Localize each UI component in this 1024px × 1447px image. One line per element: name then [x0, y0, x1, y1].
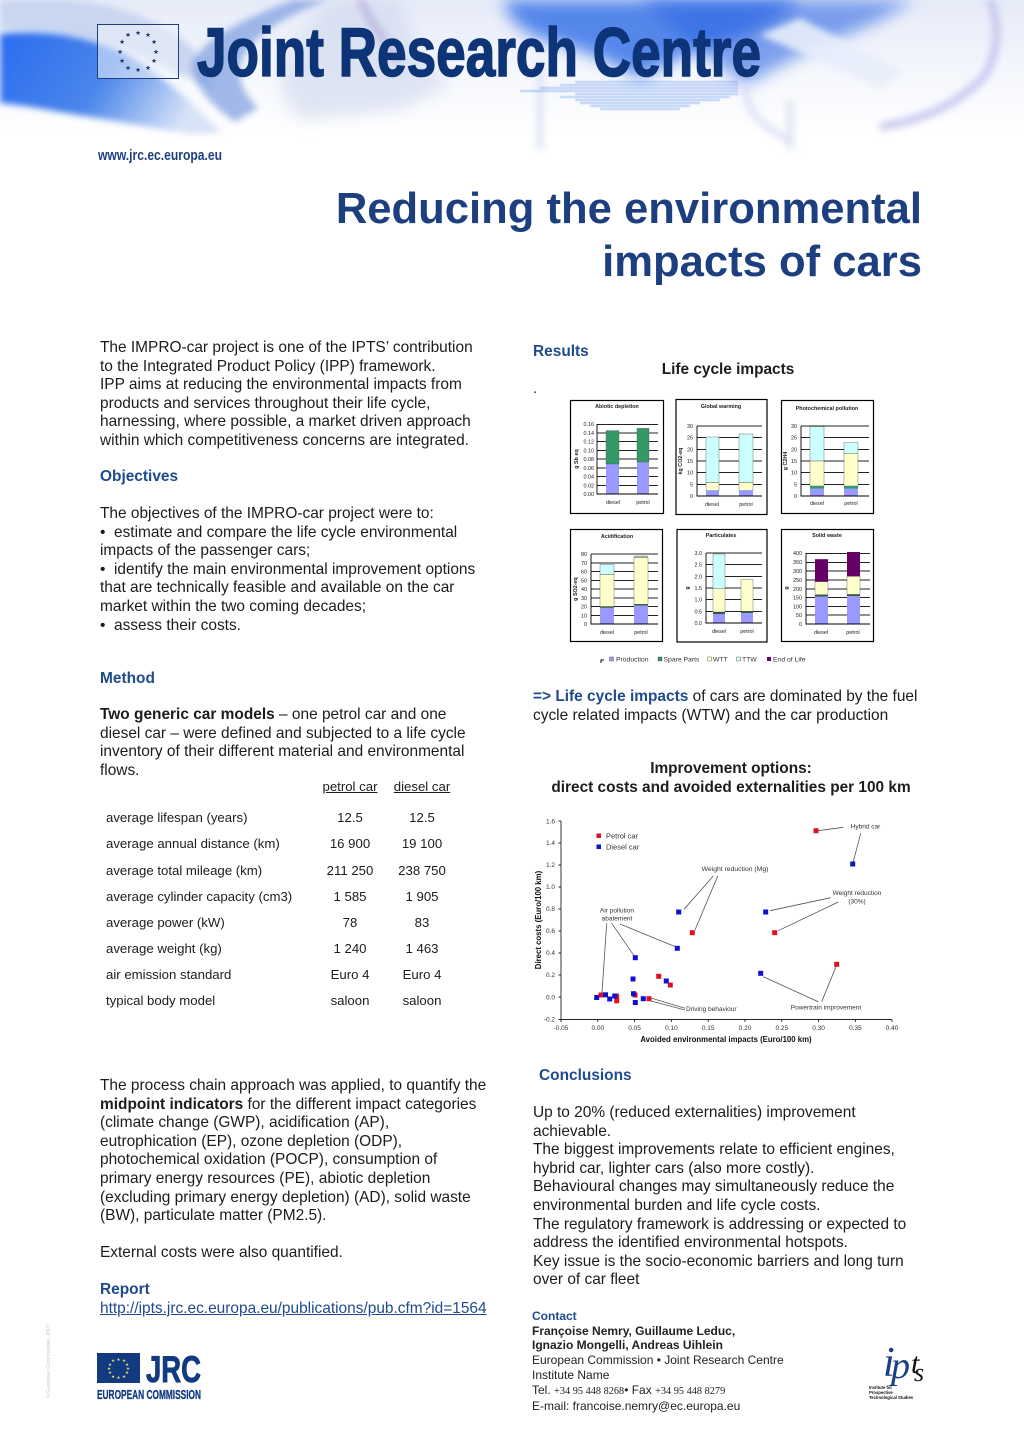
chart: Solid waste: 250: [793, 578, 802, 584]
table: car model data: 78: [343, 915, 357, 930]
text block: conclusions: Key issue is the socio-economic barriers and long turn: [533, 1253, 904, 1270]
text block: process chain approach: (BW), particulate matter (PM2.5).: [100, 1207, 326, 1224]
text block: introduction: harnessing, where possible, a market driven approach: [100, 413, 471, 430]
heading: Objectives: Objectives: [100, 468, 178, 485]
chart: Photochemical pollution: 20: [791, 448, 797, 454]
chart: Solid waste: g: [784, 586, 790, 590]
text block: introduction: within which competitiveness concerns are integrated.: [100, 432, 469, 449]
logo: JRC European Commission: ★: [126, 1366, 131, 1371]
table: car model data: 83: [415, 915, 429, 930]
axes and tick labels: 0.40: [886, 1025, 899, 1032]
petrol car data points: [598, 828, 839, 1003]
icon: EU flag outline: ★: [135, 66, 141, 74]
legend: [596, 832, 640, 852]
chart: Abiotic depletion: 0.12: [584, 440, 594, 446]
logo: JRC European Commission: ★: [116, 1357, 121, 1362]
contact block: E-mail: francoise.nemry@ec.europa.eu: [532, 1399, 740, 1413]
chart: Solid waste: Solid waste: [812, 533, 842, 539]
chart: Particulates: [677, 530, 767, 642]
table: car model data: 211 250: [327, 863, 373, 878]
logo: JRC European Commission: ★: [108, 1362, 113, 1367]
axes and tick labels: 0.15: [702, 1025, 715, 1032]
chart: Solid waste: 200: [793, 587, 802, 593]
annotation labels: Weight reduction: [833, 890, 882, 897]
chart legend: TTW: [742, 656, 757, 664]
chart: Particulates: 1.0: [694, 598, 702, 604]
chart: Photochemical pollution: 10: [791, 470, 797, 476]
logo: JRC European Commission: ★: [125, 1370, 130, 1375]
table: car model data: 1 585: [333, 889, 366, 904]
chart: Acidification: 20: [581, 604, 587, 610]
annotation labels: [600, 824, 882, 1013]
chart: Acidification: 0: [584, 622, 587, 628]
axes and tick labels: 0.4: [546, 950, 555, 957]
subheading: Life cycle impacts: Life cycle impacts: [662, 361, 794, 378]
logo: IPTS: Prospective: [869, 1390, 893, 1395]
chart: Abiotic depletion: [570, 400, 664, 514]
heading: Results: Results: [533, 343, 589, 360]
annotation labels: Hybrid car: [851, 824, 881, 830]
logo: IPTS: s: [914, 1358, 924, 1387]
heading: Method: Method: [100, 670, 155, 687]
logo: JRC European Commission: ★: [111, 1358, 116, 1363]
table: car model data: Euro 4: [331, 967, 369, 982]
icon: EU flag outline: ★: [119, 38, 125, 46]
text block: introduction: The IMPRO-car project is one of the IPTS’ contribution: [100, 339, 473, 356]
chart: Particulates: 2.5: [694, 562, 702, 568]
logo: IPTS: Institute for: [869, 1385, 892, 1390]
diesel car data points: [594, 862, 855, 1005]
chart: Photochemical pollution: 25: [791, 436, 797, 442]
contact block: European Commission • Joint Research Centre: [532, 1353, 784, 1367]
logo: JRC European Commission: ★: [107, 1366, 112, 1371]
text block: objectives: [100, 505, 475, 634]
axes and tick labels: 0.0: [546, 994, 555, 1002]
copyright note: © European Communities, 2007: [46, 1324, 52, 1398]
website address: www.jrc.ec.europa.eu: [97, 147, 222, 164]
subheading: Improvement options: Improvement options:: [650, 760, 812, 777]
text block: process chain approach: The process chain approach was applied, to quantify the: [100, 1077, 486, 1094]
chart: Global warming: [676, 400, 767, 514]
table: car model data: 1 905: [405, 889, 438, 904]
logo: JRC European Commission: ★: [122, 1374, 127, 1379]
annotation leader lines: [602, 827, 861, 1010]
chart legend: Spare Parts: [664, 656, 700, 664]
table: car model data: average lifespan (years): [106, 810, 247, 825]
table: car model data: average cylinder capacity (cm3): [106, 889, 292, 904]
text block: conclusions: address the identified environmental hotspots.: [533, 1234, 848, 1251]
axes and tick labels: 0.35: [849, 1025, 862, 1032]
chart: Acidification: 10: [581, 614, 587, 620]
text block: method: Two generic car models – one petrol car and one: [100, 706, 446, 723]
logo: IPTS: t: [911, 1347, 920, 1380]
chart: Photochemical pollution: diesel: [810, 501, 824, 507]
table: car model data: average annual distance (km): [106, 836, 280, 851]
chart: Solid waste: 150: [793, 596, 802, 602]
chart: Solid waste: 50: [796, 613, 802, 619]
icon: EU flag outline: ★: [145, 64, 151, 72]
bar charts: life cycle impacts: [570, 398, 874, 664]
table: car model data: 19 100: [402, 836, 442, 851]
chart: Solid waste: 400: [793, 551, 802, 557]
text block: conclusions: environmental burden and life cycle costs.: [533, 1197, 820, 1214]
table: car model data: average power (kW): [106, 915, 225, 930]
table: car model data: 12.5: [409, 810, 435, 825]
table: car model data: air emission standard: [106, 967, 231, 982]
text block: objectives: • estimate and compare the life cycle environmental: [100, 524, 457, 541]
chart: Acidification: g SO2-eq: [573, 577, 579, 601]
axes and tick labels: 0.2: [546, 972, 555, 979]
logo: IPTS: Technological Studies: [869, 1395, 914, 1400]
chart legend: Production: [616, 656, 649, 664]
icon: EU flag outline: ★: [117, 48, 123, 56]
text block: conclusions: over of car fleet: [533, 1271, 639, 1288]
logo: JRC European Commission: ★: [111, 1374, 116, 1379]
table: car model data: saloon: [403, 993, 441, 1008]
chart: Particulates: 2.0: [694, 574, 702, 580]
table: car model data: average weight (kg): [106, 941, 222, 956]
contact block: Françoise Nemry, Guillaume Leduc,: [532, 1324, 735, 1338]
chart: Abiotic depletion: 0.00: [584, 492, 594, 498]
annotation labels: abatement: [602, 916, 633, 922]
chart: Global warming: kg CO2-eq: [678, 448, 684, 474]
icon: EU flag outline: ★: [119, 57, 125, 65]
chart: Global warming: 30: [687, 424, 693, 430]
contact block: Institute Name: [532, 1368, 609, 1382]
text block: objectives: market within the two coming decades;: [100, 598, 366, 615]
logo: JRC European Commission: ★: [122, 1358, 127, 1363]
axes and tick labels: 0.8: [546, 906, 555, 913]
logo: JRC European Commission: ★: [108, 1370, 113, 1375]
text block: method: diesel car – were defined and subjected to a life cycle: [100, 725, 466, 742]
chart: Abiotic depletion: 0.16: [584, 422, 594, 428]
axes and tick labels: [534, 818, 899, 1044]
chart: Solid waste: [782, 530, 874, 642]
text block: process chain approach: [100, 1077, 486, 1261]
chart: Global warming: 25: [687, 436, 693, 442]
subheading: Improvement options: [551, 760, 911, 796]
axes and tick labels: 1.4: [546, 840, 555, 847]
axes and tick labels: 0.6: [546, 928, 555, 935]
chart: Photochemical pollution: g C2H4: [783, 452, 789, 470]
legend: Diesel car: [606, 842, 640, 852]
icon: EU flag outline: ★: [151, 57, 157, 65]
chart: Photochemical pollution: 0: [794, 494, 797, 500]
text block: objectives: that are technically feasible and available on the car: [100, 579, 454, 596]
logo: JRC European Commission: ★: [125, 1362, 130, 1367]
text block: conclusions: [533, 1104, 906, 1288]
annotation labels: (30%): [848, 898, 866, 906]
chart: Abiotic depletion: 0.14: [584, 431, 594, 437]
chart: Particulates: 1.5: [694, 586, 702, 592]
axes and tick labels: 1.0: [546, 884, 555, 891]
subheading: Improvement options: direct costs and avoided externalities per 100 km: [551, 778, 911, 796]
chart: Solid waste: 300: [793, 569, 802, 575]
text block: objectives: The objectives of the IMPRO-car project were to:: [100, 505, 434, 522]
chart: Particulates: Particulates: [706, 533, 736, 539]
axes and tick labels: 0.05: [628, 1025, 641, 1032]
axes and tick labels: -0.2: [544, 1016, 555, 1024]
title: Reducing the environmental: [336, 185, 922, 233]
chart: Acidification: 70: [581, 561, 587, 567]
text block: objectives: • assess their costs.: [100, 617, 241, 634]
text block: process chain approach: (excluding primary energy depletion) (AD), solid waste: [100, 1189, 471, 1206]
text block: process chain approach: External costs were also quantified.: [100, 1244, 343, 1261]
title: [336, 185, 922, 286]
table: car model data: [106, 779, 450, 1008]
stray dot: .: [533, 381, 537, 397]
chart: Particulates: g: [685, 586, 691, 590]
table: car model data: 16 900: [330, 836, 370, 851]
text block: objectives: impacts of the passenger cars;: [100, 542, 310, 559]
chart: Global warming: 15: [687, 459, 693, 465]
table: car model data: 1 240: [333, 941, 366, 956]
icon: EU flag outline: ★: [125, 31, 131, 39]
axes and tick labels: -0.05: [554, 1025, 569, 1032]
logo: IPTS: [869, 1340, 924, 1400]
text block: process chain approach: eutrophication (EP), ozone depletion (ODP),: [100, 1133, 402, 1150]
chart: Photochemical pollution: 5: [794, 482, 797, 488]
text block: conclusions: achievable.: [533, 1123, 611, 1140]
chart: Global warming: 10: [687, 470, 693, 476]
text block: method: flows.: [100, 762, 139, 779]
chart: Photochemical pollution: 30: [791, 424, 797, 430]
contact block: Ignazio Mongelli, Andreas Uihlein: [532, 1338, 723, 1352]
text block: conclusions: hybrid car, lighter cars (also more costly).: [533, 1160, 814, 1177]
chart: Global warming: Global warming: [701, 404, 741, 410]
icon: EU flag outline: ★: [145, 31, 151, 39]
chart: Particulates: 0.5: [694, 610, 702, 616]
contact block: [532, 1309, 784, 1413]
chart: Global warming: 20: [687, 448, 693, 454]
table: car model data: diesel car: [394, 779, 450, 794]
chart: Particulates: 0.0: [694, 621, 702, 627]
chart: Particulates: petrol: [740, 629, 754, 635]
table: car model data: 1 463: [405, 941, 438, 956]
text block: life cycle conclusion: [533, 688, 917, 724]
text block: life cycle conclusion: cycle related impacts (WTW) and the car production: [533, 707, 888, 724]
text block: conclusions: Behavioural changes may simultaneously reduce the: [533, 1178, 894, 1195]
heading: Conclusions: Conclusions: [539, 1067, 632, 1084]
chart: Particulates: 3.0: [694, 551, 702, 557]
annotation labels: Air pollution: [600, 908, 634, 914]
chart: Acidification: 80: [581, 552, 587, 558]
chart: Solid waste: diesel: [814, 630, 828, 636]
icon: EU flag outline: ★: [153, 48, 159, 56]
axes and tick labels: 0.00: [591, 1025, 605, 1032]
icon: EU flag outline: ★: [151, 38, 157, 46]
text block: process chain approach: (climate change (GWP), acidification (AP),: [100, 1114, 389, 1131]
text block: conclusions: The biggest improvements relate to efficient engines,: [533, 1141, 895, 1158]
chart: Acidification: petrol: [634, 630, 648, 636]
chart: Global warming: 0: [690, 494, 693, 500]
chart: Particulates: diesel: [712, 629, 726, 635]
chart: Abiotic depletion: Abiotic depletion: [595, 404, 639, 410]
heading: Report: Report: [100, 1281, 150, 1298]
chart legend: [601, 656, 806, 664]
table: car model data: 238 750: [398, 863, 446, 878]
scatter chart: improvement options: [534, 818, 899, 1044]
icon: EU flag outline: ★: [125, 64, 131, 72]
chart: Acidification: diesel: [600, 630, 614, 636]
chart: Abiotic depletion: 0.08: [584, 457, 594, 463]
chart: Abiotic depletion: 0.02: [584, 484, 594, 490]
text block: introduction: to the Integrated Product Policy (IPP) framework.: [100, 358, 435, 375]
text block: objectives: • identify the main environmental improvement options: [100, 561, 475, 578]
chart: Solid waste: 350: [793, 560, 802, 566]
contact block: Contact: [532, 1309, 577, 1323]
chart: Global warming: diesel: [705, 502, 719, 508]
logo: IPTS: p: [888, 1345, 910, 1387]
chart: Photochemical pollution: petrol: [844, 501, 858, 507]
text block: introduction: [100, 339, 473, 449]
chart: Abiotic depletion: g Sb eq: [574, 449, 580, 469]
chart: Acidification: 50: [581, 578, 587, 584]
chart: Acidification: 60: [581, 570, 587, 576]
chart: Photochemical pollution: [782, 400, 874, 514]
icon: EU flag outline: [98, 24, 178, 78]
chart: Solid waste: 100: [793, 604, 802, 610]
table: car model data: Euro 4: [403, 967, 441, 982]
chart: Abiotic depletion: 0.10: [584, 448, 594, 454]
logo: JRC European Commission: ★: [116, 1375, 121, 1380]
heading: Joint Research Centre: Joint Research Centre: [197, 14, 761, 91]
text block: process chain approach: primary energy resources (PE), abiotic depletion: [100, 1170, 430, 1187]
icon: EU flag outline: ★: [135, 29, 141, 37]
contact block: Tel. +34 95 448 8268• Fax +34 95 448 8279: [532, 1383, 725, 1397]
chart: Global warming: 5: [690, 482, 693, 488]
text block: process chain approach: midpoint indicators for the different impact categories: [100, 1096, 476, 1113]
chart: Acidification: 40: [581, 587, 587, 593]
chart legend: WTT: [713, 656, 728, 664]
chart: Abiotic depletion: petrol: [636, 500, 650, 506]
axes and tick labels: 0.30: [812, 1025, 825, 1032]
text block: method: [100, 706, 466, 779]
annotation labels: Weight reduction (Mg): [702, 866, 768, 873]
text block: conclusions: Up to 20% (reduced externalities) improvement: [533, 1104, 856, 1121]
axes and tick labels: Avoided environmental impacts (Euro/100 km): [640, 1035, 812, 1044]
logo: JRC European Commission: JRC: [146, 1349, 201, 1390]
chart: Acidification: 30: [581, 596, 587, 602]
axes and tick labels: Direct costs (Euro/100 km): [534, 870, 543, 969]
chart: Photochemical pollution: Photochemical pollution: [796, 406, 858, 412]
text block: conclusions: The regulatory framework is addressing or expected to: [533, 1216, 906, 1233]
chart: Global warming: petrol: [739, 502, 753, 508]
axes and tick labels: 1.2: [546, 862, 555, 869]
chart: Acidification: Acidification: [601, 534, 633, 540]
text block: process chain approach: photochemical oxidation (POCP), consumption of: [100, 1151, 437, 1168]
table: car model data: average total mileage (km): [106, 863, 262, 878]
logo: JRC European Commission: [97, 1349, 201, 1402]
chart: Abiotic depletion: 0.04: [584, 474, 594, 480]
axes and tick labels: 0.20: [739, 1025, 752, 1032]
annotation labels: Powertrain improvement: [791, 1004, 861, 1012]
text block: life cycle conclusion: => Life cycle impacts of cars are dominated by the fuel: [533, 688, 917, 705]
table: car model data: 12.5: [337, 810, 363, 825]
axes and tick labels: 0.25: [775, 1025, 789, 1032]
table: car model data: saloon: [331, 993, 369, 1008]
annotation labels: Driving behaviour: [686, 1006, 737, 1013]
table: car model data: petrol car: [322, 779, 377, 794]
title: impacts of cars: [602, 238, 922, 286]
logo: IPTS: i: [883, 1340, 895, 1386]
chart: Photochemical pollution: 15: [791, 459, 797, 465]
chart: Solid waste: petrol: [846, 630, 860, 636]
header banner: [0, 0, 1024, 164]
chart: Acidification: [570, 530, 662, 642]
report link: http://ipts.jrc.ec.europa.eu/publications/pub.cfm?id=1564: [100, 1300, 487, 1317]
chart: Solid waste: 0: [799, 622, 802, 628]
legend: Petrol car: [606, 832, 639, 840]
text block: introduction: IPP aims at reducing the environmental impacts from: [100, 376, 462, 393]
table: car model data: typical body model: [106, 993, 215, 1008]
chart: Abiotic depletion: diesel: [606, 500, 620, 506]
axes and tick labels: 0.10: [665, 1025, 678, 1032]
text block: introduction: products and services throughout their life cycle,: [100, 395, 430, 412]
chart legend: End of Life: [773, 656, 806, 664]
chart: Abiotic depletion: 0.06: [584, 466, 594, 472]
axes and tick labels: 1.6: [546, 818, 555, 826]
text block: method: inventory of their different material and environmental: [100, 743, 464, 760]
